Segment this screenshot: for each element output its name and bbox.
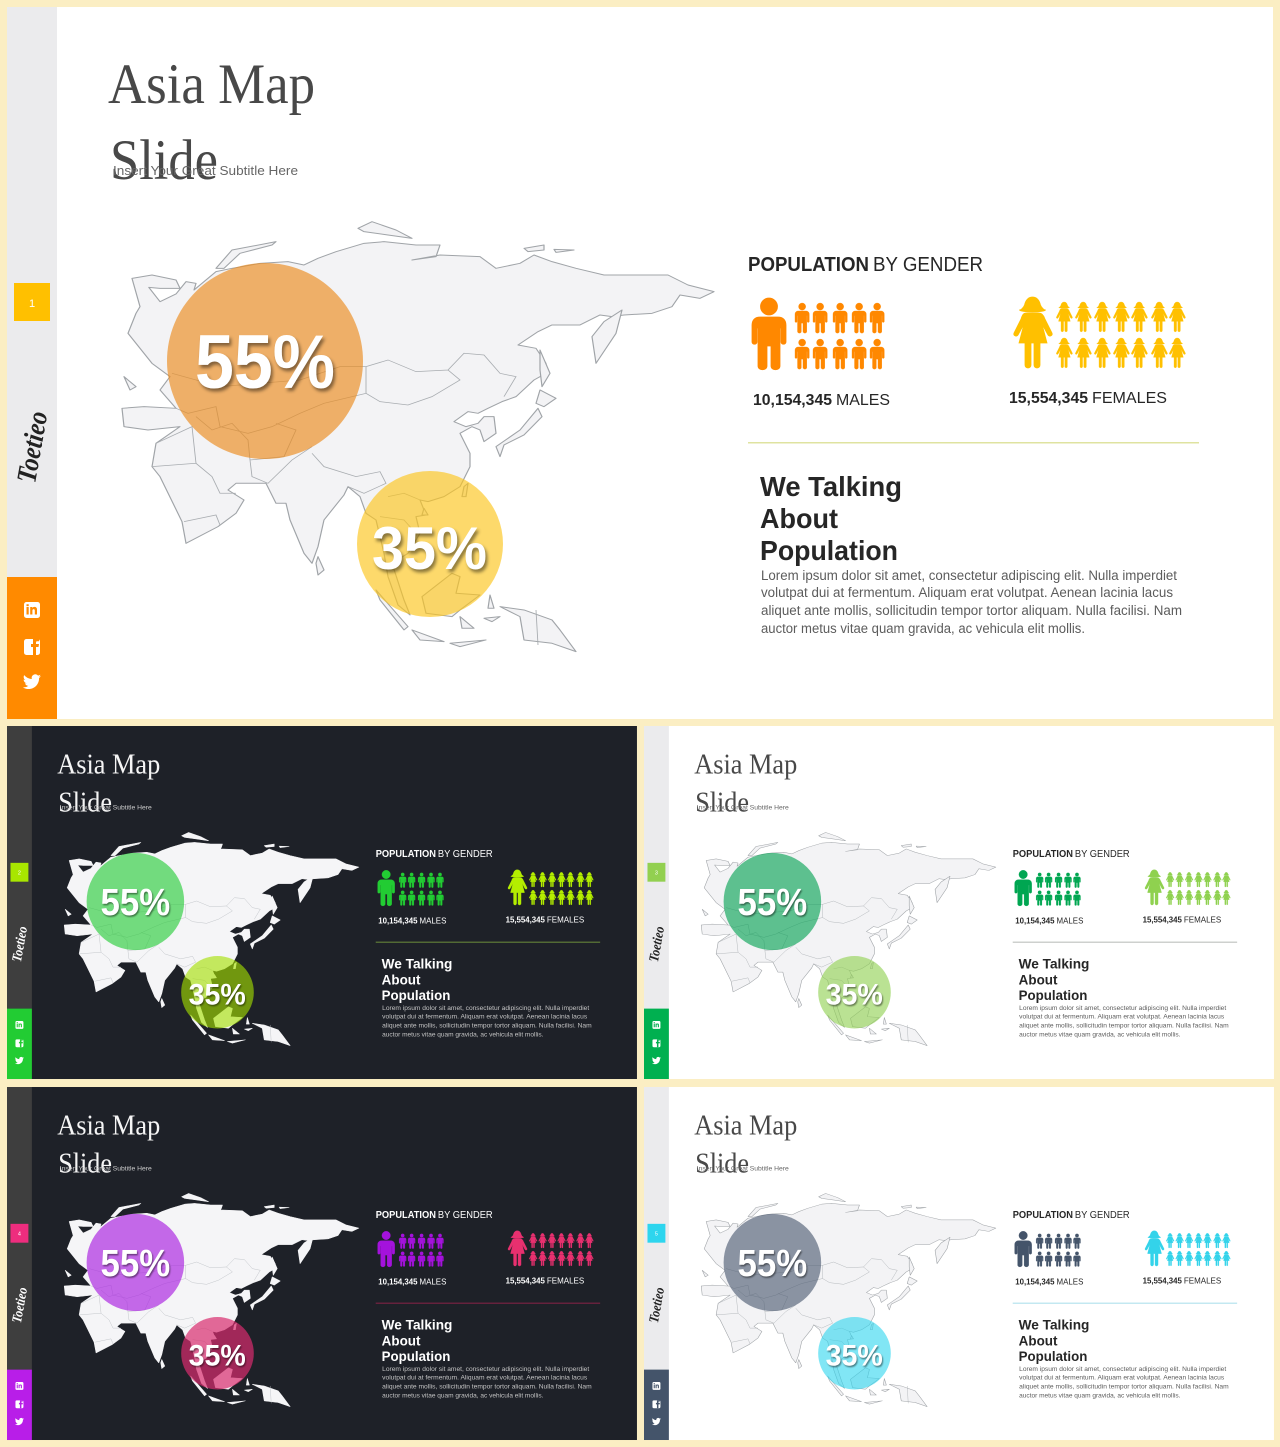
female count: 15,554,345 — [506, 1276, 545, 1285]
population heading: BY GENDER — [438, 1210, 493, 1221]
body text: volutpat dui at fermentum. Aliquam erat volutpat. Aenean lacinia lacus — [1019, 1375, 1225, 1382]
female count: 15,554,345 — [506, 915, 545, 924]
icon: males — [378, 1231, 444, 1267]
section heading: About — [382, 971, 421, 987]
icon: females — [508, 1231, 593, 1266]
population heading: POPULATION — [1013, 849, 1073, 860]
section heading: Population — [1019, 1348, 1087, 1364]
body text: aliquet ante mollis, sollicitudin tempor tortor aliquam. Nulla facilisi. Nam — [1019, 1022, 1229, 1029]
map of Asia — [64, 832, 359, 1046]
section heading: We Talking — [382, 1316, 452, 1332]
subtitle: Insert Your Great Subtitle Here — [60, 804, 152, 811]
brand name: Toetieo — [10, 925, 31, 963]
section heading: Population — [382, 987, 450, 1003]
population heading: POPULATION — [748, 254, 869, 276]
title: Slide — [110, 129, 218, 192]
section heading: We Talking — [1019, 955, 1089, 971]
title: Slide — [695, 787, 749, 818]
circle 35%: 35% — [189, 1340, 246, 1373]
body text: aliquet ante mollis, sollicitudin tempor tortor aliquam. Nulla facilisi. Nam — [761, 603, 1182, 618]
circle 35% — [181, 956, 254, 1028]
body text: Lorem ipsum dolor sit amet, consectetur adipiscing elit. Nulla imperdiet — [382, 1366, 589, 1373]
page number square: 4 — [18, 1232, 21, 1238]
section heading: About — [1019, 1332, 1058, 1348]
sidebar — [644, 1087, 669, 1440]
panel: dark slide, green theme — [7, 726, 637, 1079]
circle 55% — [724, 1214, 821, 1311]
panel: dark slide, purple theme — [7, 1087, 637, 1440]
title — [694, 750, 797, 818]
body text — [1019, 1005, 1229, 1038]
icon: males — [378, 870, 444, 906]
title: Slide — [58, 787, 112, 818]
title: Asia Map — [694, 1111, 797, 1142]
circle 55% — [87, 853, 184, 950]
page number square — [10, 863, 28, 882]
page number square — [647, 863, 665, 882]
male count: MALES — [1057, 1277, 1083, 1286]
panel: light slide, slate and cyan theme — [644, 1087, 1274, 1440]
icon: females — [1014, 297, 1185, 368]
icon: females — [508, 870, 593, 905]
sidebar — [644, 726, 669, 1079]
circle 55%: 55% — [101, 881, 170, 923]
body text: auctor metus vitae quam gravida, ac vehicula elit mollis. — [382, 1031, 544, 1038]
title: Asia Map — [694, 750, 797, 781]
body text: auctor metus vitae quam gravida, ac vehicula elit mollis. — [1019, 1392, 1181, 1399]
male count: 10,154,345 — [1015, 1277, 1055, 1286]
body text: Lorem ipsum dolor sit amet, consectetur adipiscing elit. Nulla imperdiet — [382, 1005, 589, 1012]
title: Slide — [58, 1148, 112, 1179]
circle 55%: 55% — [738, 1242, 807, 1284]
brand name: Toetieo — [10, 1286, 31, 1324]
page number square — [14, 283, 50, 321]
female count: 15,554,345 — [1143, 1276, 1182, 1285]
body text: aliquet ante mollis, sollicitudin tempor tortor aliquam. Nulla facilisi. Nam — [382, 1022, 592, 1029]
page number square: 2 — [18, 871, 21, 877]
sidebar — [7, 726, 32, 1079]
population heading: BY GENDER — [873, 254, 983, 276]
social icons panel — [7, 1370, 32, 1440]
male count: MALES — [836, 392, 890, 409]
circle 55%: 55% — [101, 1242, 170, 1284]
circle 35%: 35% — [826, 979, 883, 1012]
circle 55% — [167, 263, 363, 459]
body text: volutpat dui at fermentum. Aliquam erat volutpat. Aenean lacinia lacus — [382, 1014, 588, 1021]
population heading: BY GENDER — [1075, 1210, 1130, 1221]
body text: Lorem ipsum dolor sit amet, consectetur adipiscing elit. Nulla imperdiet — [1019, 1005, 1226, 1012]
section heading — [382, 1316, 452, 1364]
icon: males — [1015, 1231, 1081, 1267]
subtitle: Insert Your Great Subtitle Here — [697, 804, 789, 811]
title: Asia Map — [108, 53, 315, 116]
social icons panel — [7, 1009, 32, 1079]
male count: MALES — [420, 916, 446, 925]
section heading: About — [382, 1332, 421, 1348]
body text: Lorem ipsum dolor sit amet, consectetur adipiscing elit. Nulla imperdiet — [1019, 1366, 1226, 1373]
section heading: We Talking — [760, 471, 902, 502]
subtitle: Insert Your Great Subtitle Here — [113, 163, 298, 178]
section heading: Population — [1019, 987, 1087, 1003]
circle 35% — [818, 1317, 891, 1389]
male count: 10,154,345 — [1015, 916, 1055, 925]
section heading — [382, 955, 452, 1003]
circle 35%: 35% — [826, 1340, 883, 1373]
map of Asia — [701, 832, 996, 1046]
body text — [761, 568, 1182, 636]
population heading: POPULATION — [1013, 1210, 1073, 1221]
population heading: POPULATION — [376, 849, 436, 860]
sidebar — [7, 7, 57, 719]
circle 55% — [87, 1214, 184, 1311]
social icons panel — [644, 1009, 669, 1079]
male count: 10,154,345 — [753, 392, 832, 409]
population heading: BY GENDER — [438, 849, 493, 860]
title — [57, 750, 160, 818]
brand name: Toetieo — [11, 409, 54, 485]
sidebar — [7, 1087, 32, 1440]
icon: males — [1015, 870, 1081, 906]
social icons panel — [644, 1370, 669, 1440]
circle 55%: 55% — [195, 320, 335, 405]
icon: females — [1145, 870, 1230, 905]
title — [108, 53, 315, 192]
title — [57, 1111, 160, 1179]
body text: aliquet ante mollis, sollicitudin tempor tortor aliquam. Nulla facilisi. Nam — [382, 1383, 592, 1390]
title — [694, 1111, 797, 1179]
map of Asia — [701, 1193, 996, 1407]
page number square: 5 — [655, 1232, 658, 1238]
body text — [382, 1366, 592, 1399]
population heading: POPULATION — [376, 1210, 436, 1221]
title: Asia Map — [57, 750, 160, 781]
female count: FEMALES — [1184, 915, 1221, 924]
brand name: Toetieo — [647, 925, 668, 963]
map of Asia — [122, 222, 714, 652]
body text — [1019, 1366, 1229, 1399]
circle 35%: 35% — [372, 515, 487, 582]
body text: volutpat dui at fermentum. Aliquam erat volutpat. Aenean lacinia lacus — [382, 1375, 588, 1382]
section heading: Population — [760, 535, 898, 566]
body text: volutpat dui at fermentum. Aliquam erat volutpat. Aenean lacinia lacus — [1019, 1014, 1225, 1021]
section heading: We Talking — [1019, 1316, 1089, 1332]
female count: FEMALES — [1092, 390, 1167, 407]
section heading — [1019, 1316, 1089, 1364]
section heading: Population — [382, 1348, 450, 1364]
page number square: 1 — [29, 298, 35, 310]
panel: light slide, green theme — [644, 726, 1274, 1079]
body text: auctor metus vitae quam gravida, ac vehicula elit mollis. — [761, 621, 1085, 636]
female count: FEMALES — [547, 1276, 584, 1285]
icon: males — [752, 298, 884, 370]
circle 35% — [357, 471, 503, 617]
title: Slide — [695, 1148, 749, 1179]
map of Asia — [64, 1193, 359, 1407]
body text: auctor metus vitae quam gravida, ac vehicula elit mollis. — [382, 1392, 544, 1399]
page number square: 3 — [655, 871, 658, 877]
circle 55% — [724, 853, 821, 950]
male count: 10,154,345 — [378, 916, 418, 925]
circle 35% — [818, 956, 891, 1028]
brand name: Toetieo — [647, 1286, 668, 1324]
section heading: About — [1019, 971, 1058, 987]
panel: main slide, orange theme — [7, 7, 1273, 719]
body text: Lorem ipsum dolor sit amet, consectetur adipiscing elit. Nulla imperdiet — [761, 568, 1177, 583]
circle 35%: 35% — [189, 979, 246, 1012]
section heading — [760, 471, 902, 566]
section heading: About — [760, 503, 838, 534]
subtitle: Insert Your Great Subtitle Here — [60, 1165, 152, 1172]
body text: aliquet ante mollis, sollicitudin tempor tortor aliquam. Nulla facilisi. Nam — [1019, 1383, 1229, 1390]
population heading: BY GENDER — [1075, 849, 1130, 860]
social icons panel — [7, 577, 57, 719]
male count: MALES — [1057, 916, 1083, 925]
body text — [382, 1005, 592, 1038]
female count: 15,554,345 — [1009, 390, 1088, 407]
circle 55%: 55% — [738, 881, 807, 923]
female count: FEMALES — [547, 915, 584, 924]
body text: volutpat dui at fermentum. Aliquam erat volutpat. Aenean lacinia lacus — [761, 585, 1173, 600]
section heading: We Talking — [382, 955, 452, 971]
circle 35% — [181, 1317, 254, 1389]
page number square — [647, 1224, 665, 1243]
title: Asia Map — [57, 1111, 160, 1142]
body text: auctor metus vitae quam gravida, ac vehicula elit mollis. — [1019, 1031, 1181, 1038]
icon: females — [1145, 1231, 1230, 1266]
section heading — [1019, 955, 1089, 1003]
male count: MALES — [420, 1277, 446, 1286]
male count: 10,154,345 — [378, 1277, 418, 1286]
subtitle: Insert Your Great Subtitle Here — [697, 1165, 789, 1172]
female count: FEMALES — [1184, 1276, 1221, 1285]
page number square — [10, 1224, 28, 1243]
female count: 15,554,345 — [1143, 915, 1182, 924]
